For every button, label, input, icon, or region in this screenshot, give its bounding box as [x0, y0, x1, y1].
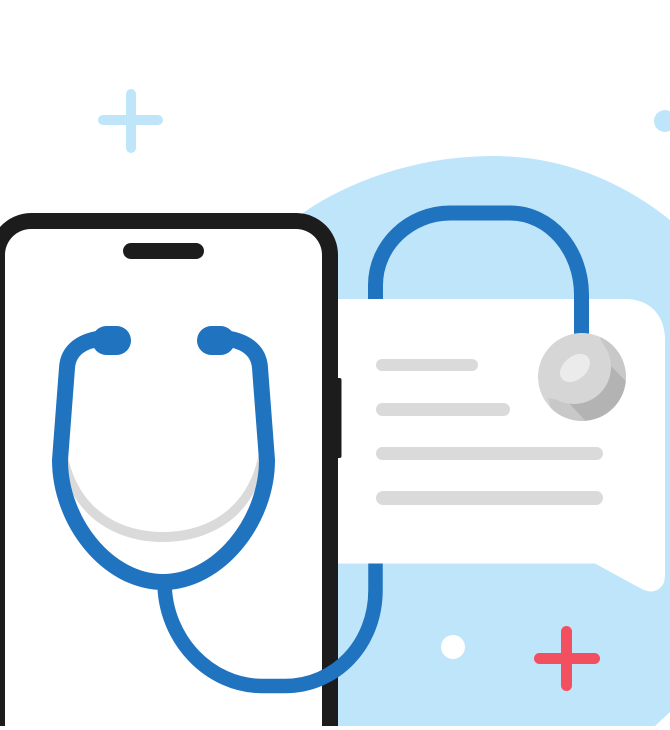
stethoscope tube: to chest piece: [574, 298, 589, 340]
icon: light blue plus top left: [98, 89, 163, 153]
icon: chest piece: [538, 333, 626, 421]
phone side button: [336, 378, 342, 458]
icon: light blue dot top right: [654, 110, 670, 132]
stethoscope tube: upper arc: [376, 213, 582, 300]
phone notch: [123, 243, 204, 259]
white dot: [441, 635, 465, 659]
text placeholder lines: [376, 359, 603, 505]
right ear tip: [197, 326, 235, 355]
background blob: [303, 156, 670, 726]
stethoscope: headset: [60, 326, 267, 582]
gray shadow crescent: [64, 452, 262, 542]
stethoscope tube: lower loop: [164, 564, 376, 686]
icon: red plus: [534, 626, 600, 691]
phone body: [0, 213, 338, 726]
left ear tip: [92, 326, 131, 355]
panel: chat bubble: [330, 299, 665, 592]
